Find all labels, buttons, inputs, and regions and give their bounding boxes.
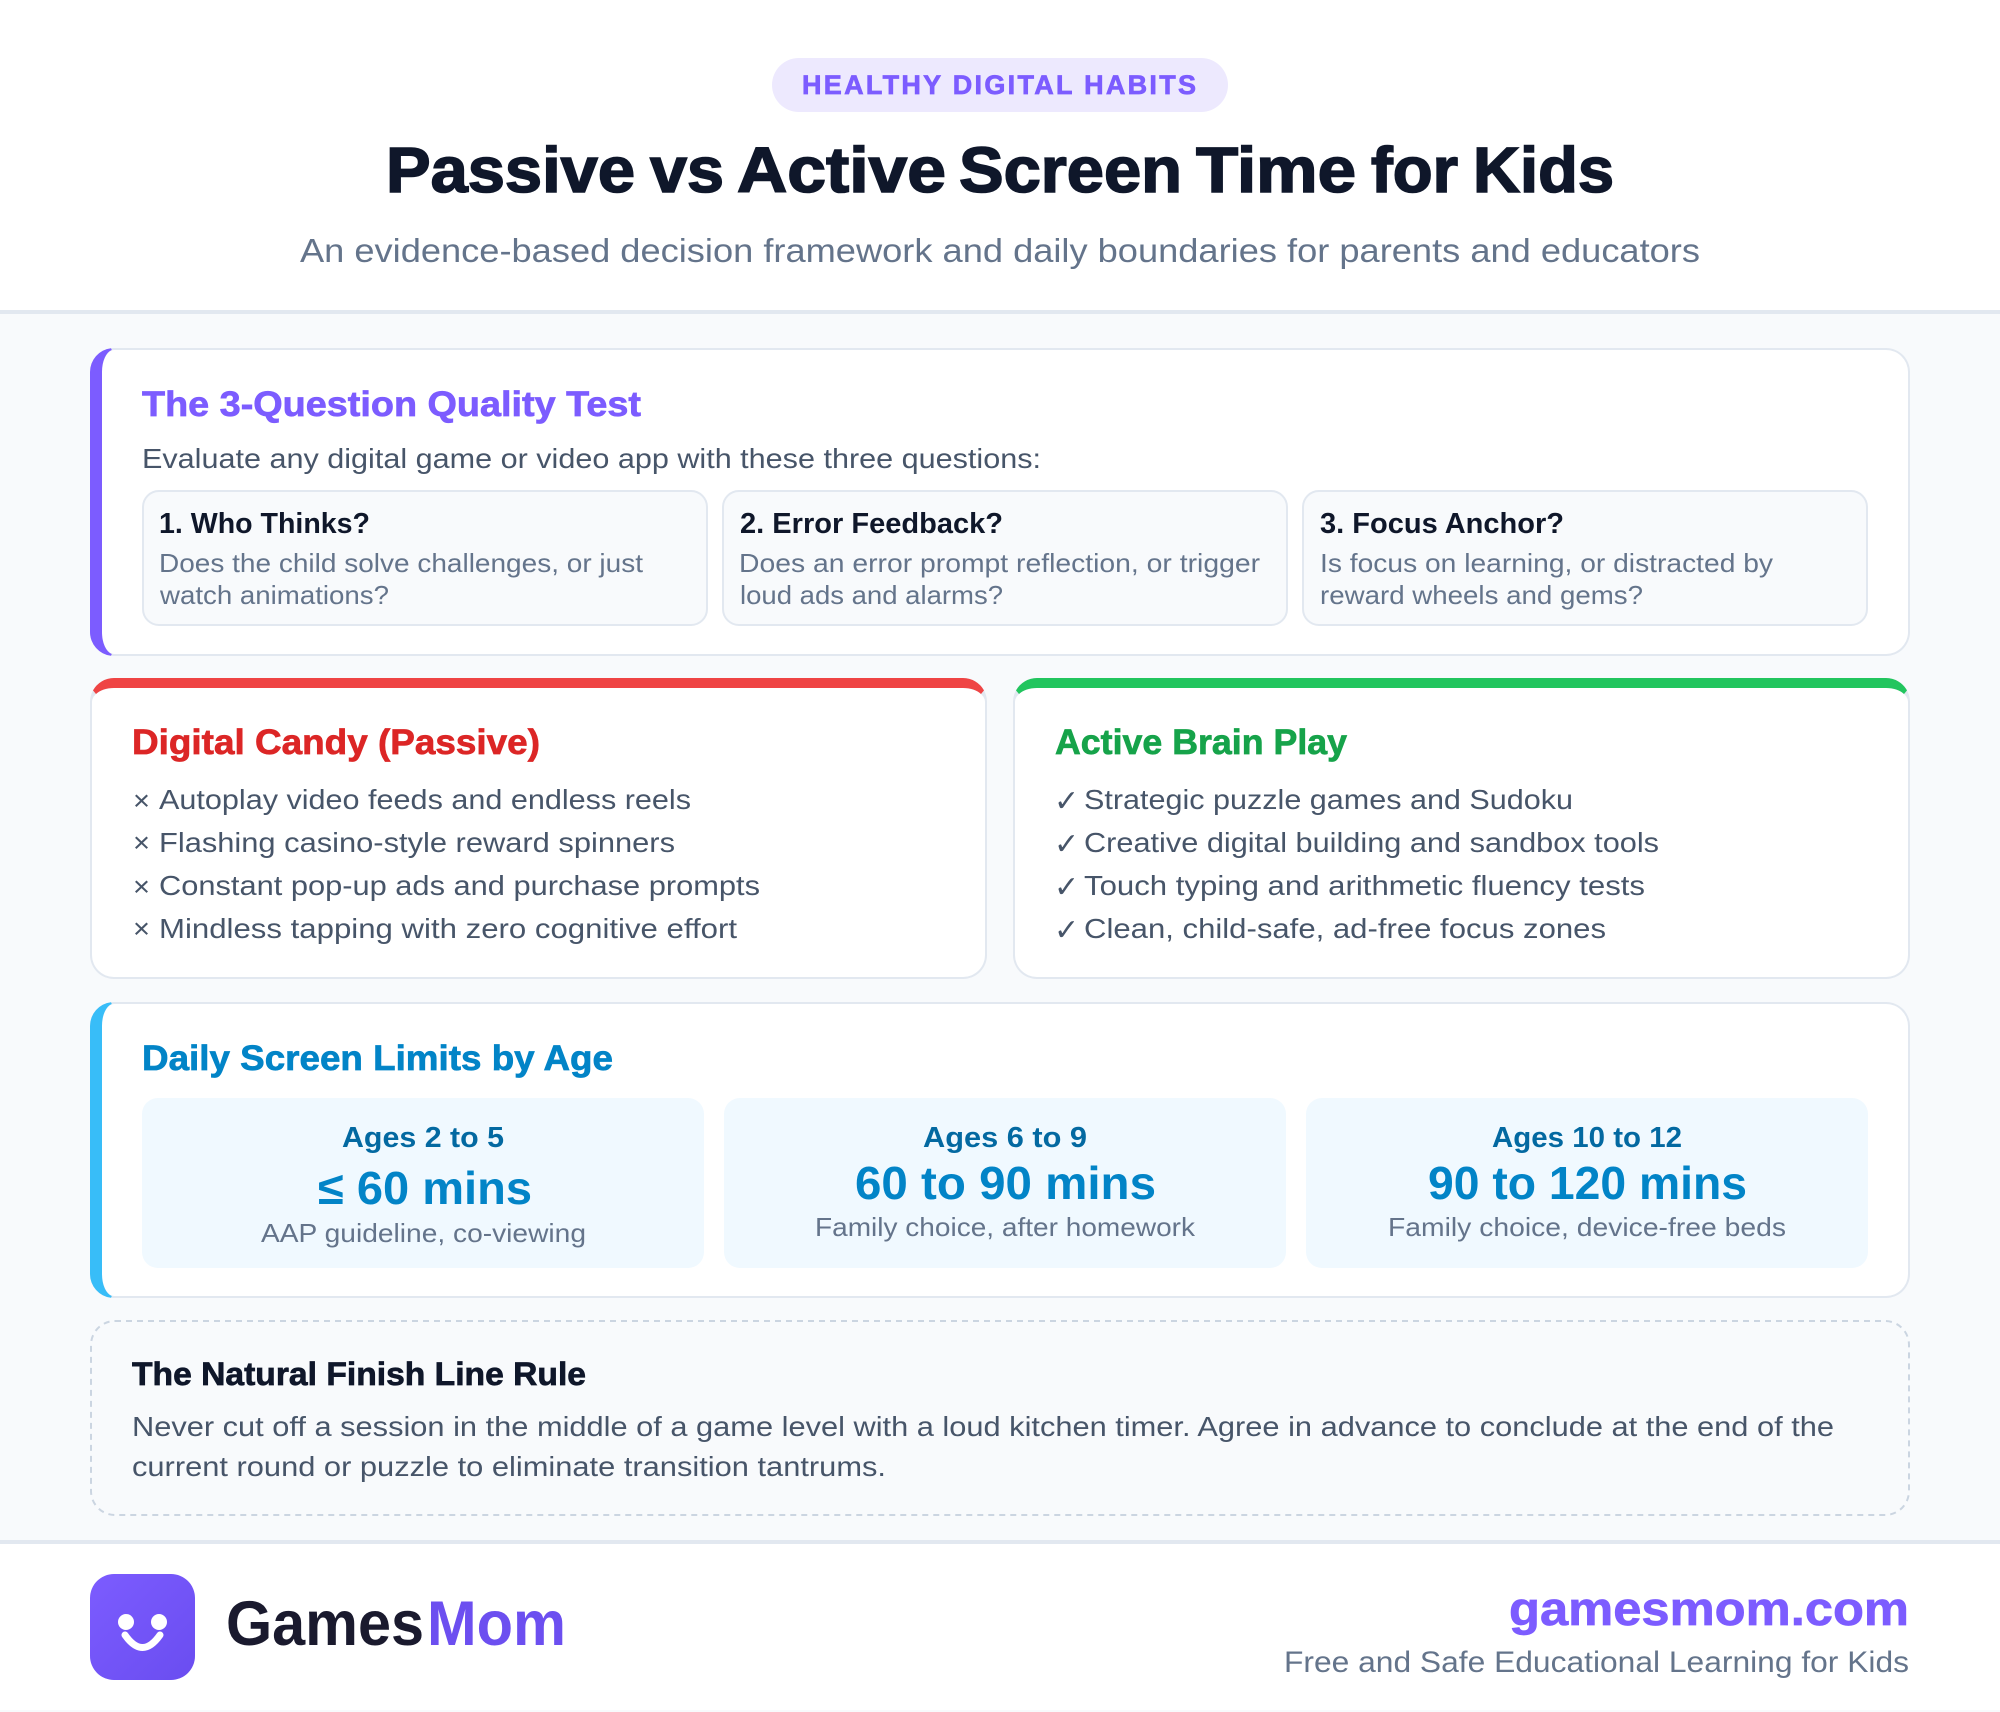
list: passive examples: × [133, 871, 150, 902]
age card: 2 to 5: AAP guideline, co-viewing [261, 1218, 586, 1248]
panel: natural finish line rule [91, 1321, 1909, 1515]
question 1: watch animations? [159, 580, 389, 610]
list: passive examples: × [133, 785, 150, 816]
icon: smiling logo [90, 1574, 195, 1680]
title [386, 134, 1614, 206]
heading: active brain play: Active Brain Play [1055, 723, 1348, 762]
list: active examples: ✓ [1054, 784, 1079, 819]
age card: 10 to 12 [1306, 1098, 1868, 1268]
question 1: Does the child solve challenges, or just [159, 548, 644, 578]
list: active examples: ✓ [1054, 827, 1079, 862]
title: Active [737, 134, 946, 206]
age card: 6 to 9: 60 to 90 mins [855, 1157, 1156, 1209]
list: active examples: Strategic puzzle games and Sudoku [1084, 784, 1573, 815]
list: passive examples: Autoplay video feeds and endless reels [159, 784, 691, 815]
list: active examples: Touch typing and arithmetic fluency tests [1084, 870, 1645, 901]
question 3 [1303, 491, 1867, 625]
question 2: Does an error prompt reflection, or trigger [739, 548, 1260, 578]
age card: 6 to 9: Family choice, after homework [815, 1212, 1196, 1242]
list: passive examples: Mindless tapping with zero cognitive effort [159, 913, 737, 944]
title: vs [650, 134, 724, 206]
panel: active brain play [1013, 678, 1910, 979]
rule description [132, 1411, 1834, 1482]
rule description: current round or puzzle to eliminate transition tantrums. [132, 1451, 886, 1482]
heading: daily screen limits: Daily Screen Limits by Age [142, 1039, 613, 1078]
list: active examples: ✓ [1054, 870, 1079, 905]
list: active examples: Clean, child-safe, ad-free focus zones [1084, 913, 1606, 944]
title: Time [1196, 134, 1356, 206]
panel: 3-question quality test [90, 348, 1910, 656]
title: for [1371, 134, 1458, 206]
question 3: Is focus on learning, or distracted by [1320, 548, 1773, 578]
age card: 10 to 12: Family choice, device-free beds [1388, 1212, 1786, 1242]
list: passive examples: Flashing casino-style reward spinners [159, 827, 675, 858]
website url: gamesmom.com [1509, 1582, 1909, 1635]
badge: healthy digital habits: HEALTHY DIGITAL HABITS [802, 70, 1196, 100]
age card: 6 to 9: Ages 6 to 9 [923, 1122, 1087, 1154]
brand name: Games [226, 1589, 424, 1659]
title: Screen [959, 134, 1182, 206]
header [0, 0, 2000, 314]
list: passive examples: × [133, 827, 150, 858]
brand name: Mom [427, 1589, 566, 1659]
panel: daily screen limits by age [90, 1002, 1910, 1298]
badge: healthy digital habits [772, 58, 1228, 112]
list: passive examples [133, 784, 760, 944]
brand name [226, 1589, 566, 1659]
tagline: Free and Safe Educational Learning for Kids [1284, 1646, 1909, 1679]
question 1 [143, 491, 707, 625]
question 3: 3. Focus Anchor? [1320, 508, 1564, 540]
intro text: Evaluate any digital game or video app with these three questions: [142, 443, 1041, 474]
question 3: reward wheels and gems? [1320, 580, 1643, 610]
question 2: 2. Error Feedback? [740, 508, 1003, 540]
question 2 [723, 491, 1287, 625]
rule description: Never cut off a session in the middle of a game level with a loud kitchen timer. Agree in advance to conclude at the end of the [132, 1411, 1834, 1442]
list: active examples: ✓ [1054, 913, 1079, 948]
heading: quality test: The 3-Question Quality Test [142, 385, 641, 424]
age card: 10 to 12: 90 to 120 mins [1428, 1157, 1747, 1209]
question 1: 1. Who Thinks? [159, 508, 370, 540]
age card: 6 to 9 [724, 1098, 1286, 1268]
list: passive examples: × [133, 913, 150, 944]
heading: digital candy: Digital Candy (Passive) [132, 723, 540, 762]
footer [0, 1540, 2000, 1710]
list: active examples [1054, 784, 1659, 948]
subtitle: An evidence-based decision framework and daily boundaries for parents and educators [300, 232, 1700, 269]
panel: digital candy (passive) [90, 678, 987, 979]
heading: finish line rule: The Natural Finish Line Rule [132, 1356, 586, 1392]
list: active examples: Creative digital building and sandbox tools [1084, 827, 1659, 858]
age card: 10 to 12: Ages 10 to 12 [1492, 1122, 1682, 1154]
title: Kids [1473, 134, 1614, 206]
age card: 2 to 5: ≤ 60 mins [318, 1162, 532, 1214]
list: passive examples: Constant pop-up ads and purchase prompts [159, 870, 760, 901]
age card: 2 to 5 [142, 1098, 704, 1268]
title: Passive [386, 134, 635, 206]
age card: 2 to 5: Ages 2 to 5 [342, 1122, 504, 1154]
question 2: loud ads and alarms? [740, 580, 1003, 610]
